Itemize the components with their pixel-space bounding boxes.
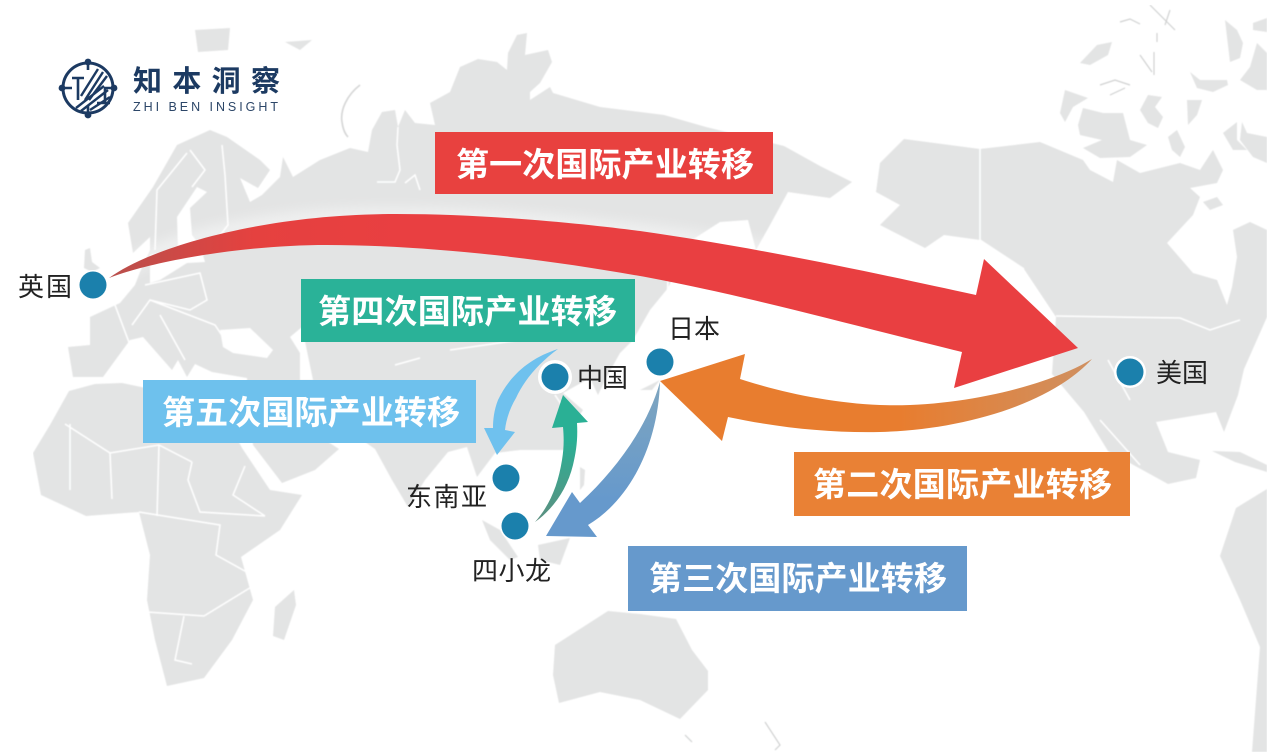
map: Madagascar (273, 590, 296, 640)
label: third transfer: 第三次国际产业转移 (649, 560, 947, 597)
map: Novaya Zemlya arc (342, 85, 360, 137)
map: North America (876, 139, 1267, 484)
node and label: USA (1114, 356, 1208, 388)
node and label: Japan: 日本 (668, 314, 720, 344)
label: fourth transfer: 第四次国际产业转移 (318, 293, 617, 330)
label: first transfer: 第一次国际产业转移 (456, 146, 754, 183)
arrow: fifth transfer, China to Southeast Asia (light blue) (484, 349, 558, 455)
map: borders (65, 127, 1240, 664)
logo wordmark English: ZHI BEN INSIGHT (133, 100, 278, 114)
map: South America (1220, 489, 1267, 752)
map: Great Britain (84, 248, 100, 272)
map: Sumatra, Borneo, Philippines (482, 467, 585, 565)
map: Baltic Sea (150, 187, 207, 283)
icon: circuit globe (59, 59, 117, 118)
label: fifth transfer (143, 380, 476, 443)
arrow 1 glow (108, 215, 976, 295)
map: Caspian Sea (290, 327, 313, 380)
node and label: China (538, 360, 628, 394)
node and label: Four Asian Tigers: 四小龙 (472, 556, 551, 586)
logo wordmark Chinese: 知本洞察 (133, 65, 280, 98)
arrow: first transfer, UK to USA (red) (109, 214, 1078, 388)
map: Eurasia (68, 33, 852, 507)
arrow: second transfer, USA to Japan (orange) (660, 354, 1092, 441)
node and label: UK: 英国 (18, 272, 72, 302)
map: Arctic Canada and Greenland (1060, 18, 1267, 210)
map: Australia (553, 611, 708, 719)
label: second transfer: 第二次国际产业转移 (813, 466, 1112, 503)
map: small Arctic islets (685, 5, 1175, 750)
node and label: Southeast Asia (406, 463, 521, 512)
label: fifth transfer: 第五次国际产业转移 (162, 394, 460, 431)
map: Cuba and Caribbean (1212, 451, 1267, 472)
label: second transfer (794, 452, 1130, 516)
node and label: Japan (645, 314, 720, 377)
node and label: China: 中国 (577, 363, 628, 393)
logo (59, 59, 280, 118)
map: Japan coast (640, 380, 660, 390)
arrow: fourth transfer, Four Tigers to China (green) (535, 395, 588, 522)
node and label: Southeast Asia: 东南亚 (406, 482, 487, 512)
arrow: third transfer, Japan to Four Tigers (blue) (546, 382, 660, 537)
label: third transfer (628, 546, 967, 611)
node and label: USA: 美国 (1156, 358, 1208, 388)
map: Africa (33, 383, 302, 686)
label: fourth transfer (301, 279, 635, 342)
map: Black Sea (220, 328, 273, 358)
node and label: UK (18, 270, 108, 302)
label: first transfer (435, 132, 773, 194)
node and label: Four Asian Tigers (472, 511, 551, 586)
map: Arctic islands north of Europe (195, 28, 312, 52)
